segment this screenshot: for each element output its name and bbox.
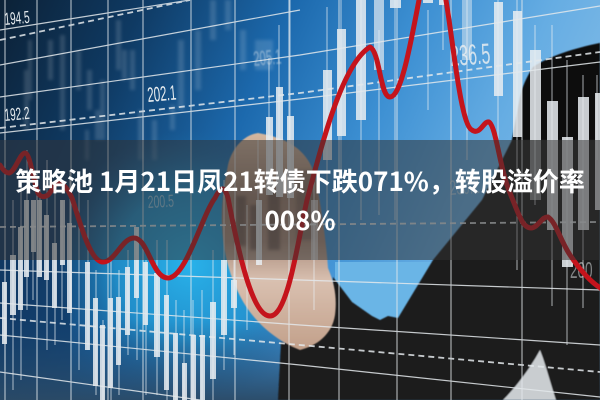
- title: [15, 162, 585, 238]
- chart value labels: 205.1: [252, 45, 282, 71]
- chart value labels: 202.1: [146, 81, 177, 107]
- translucent title band: [0, 140, 600, 260]
- title: 策略池 1月21日凤21转债下跌071%，转股溢价率: [15, 162, 585, 199]
- finger shadows on hand: [236, 170, 316, 250]
- businessman hand: [222, 133, 336, 350]
- chart value labels: 236.5: [449, 37, 491, 72]
- red trend line: [0, 0, 600, 316]
- title: 008%: [264, 201, 336, 238]
- chart value labels: [4, 8, 593, 284]
- faint background candlesticks: [24, 0, 273, 160]
- chart value labels: 192.2: [4, 104, 31, 126]
- businessman suit: [278, 43, 600, 400]
- chart value labels: 200: [570, 258, 593, 284]
- chart value labels: 194.5: [4, 8, 31, 30]
- white shirt triangle: [503, 350, 556, 400]
- chart value labels: 200.5: [147, 192, 174, 213]
- chart value labels: 230.2: [449, 175, 480, 200]
